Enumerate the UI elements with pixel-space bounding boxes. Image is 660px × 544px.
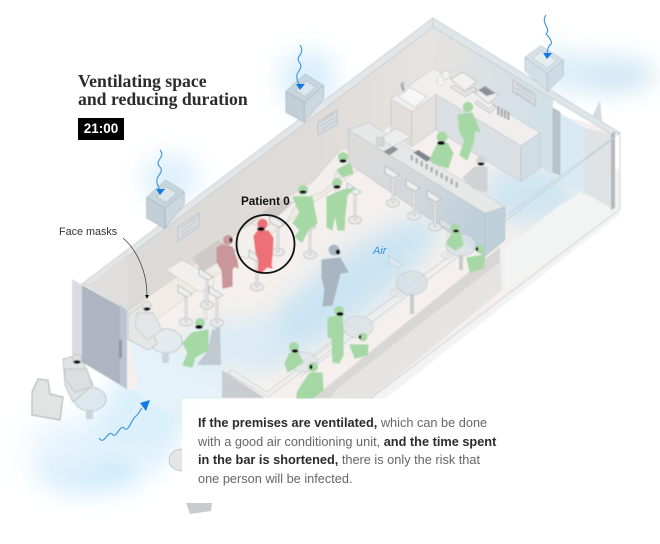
people [65, 102, 487, 398]
left wall [82, 18, 433, 312]
explanatory text [198, 415, 496, 486]
title [78, 71, 248, 109]
wavy air arrows [99, 15, 552, 440]
circle: patient 0 highlight [236, 215, 294, 273]
person: green booth [183, 319, 208, 367]
text panel [182, 399, 512, 503]
front wall stub [222, 343, 335, 398]
person: grey walking [322, 245, 348, 306]
person: patient 0 [254, 219, 273, 273]
time badge: 21:00 [84, 121, 118, 136]
AC unit left [147, 180, 184, 228]
person: green standing [327, 179, 355, 230]
person: green far right [447, 224, 463, 250]
person: green front left [285, 343, 303, 372]
wall bench [127, 157, 362, 328]
bar counter [348, 123, 505, 257]
person: green crouched [350, 333, 368, 358]
wall vents [178, 80, 535, 241]
person: green centre [328, 307, 344, 363]
time badge [78, 118, 124, 140]
person: seated left white [135, 302, 162, 340]
person: behind bar [430, 132, 453, 168]
arrow: air through door [99, 400, 150, 440]
label: air: Air [373, 245, 386, 257]
label: face masks: Face masks [59, 226, 117, 238]
arrow: air into left unit [156, 150, 165, 195]
person: green front [297, 363, 323, 398]
AC unit right [525, 46, 563, 92]
person: mauve exposed [217, 236, 238, 288]
arrow: air into right unit [543, 15, 552, 59]
front glass wall outlines [292, 133, 620, 399]
explanatory text: in the bar is shortened, there is only the risk that [198, 452, 480, 467]
person: green at bar table [337, 153, 353, 177]
title: Ventilating space [78, 71, 207, 91]
floor [127, 78, 620, 420]
person: green seated [293, 186, 317, 242]
person: grey bartender [463, 157, 487, 192]
door panel [72, 279, 127, 389]
person: seated lower white [65, 354, 92, 392]
person: green far right seated [467, 245, 485, 272]
front platform band [313, 210, 620, 399]
AC unit middle [286, 74, 324, 122]
kitchen counter [391, 68, 540, 182]
right outer floor [505, 168, 620, 290]
blue air glows [30, 48, 656, 491]
right wall [433, 18, 620, 210]
label: patient 0: Patient 0 [241, 195, 290, 208]
AC units [147, 46, 563, 228]
explanatory text: If the premises are ventilated, which can be done [198, 415, 487, 430]
explanatory text: with a good air conditioning unit, and the time spent [198, 434, 496, 448]
leader: face masks [123, 238, 149, 299]
arrow: air into middle unit [296, 45, 305, 90]
stools and tables [32, 166, 476, 420]
sink [398, 87, 427, 107]
explanatory text: one person will be infected. [198, 470, 353, 486]
person: kitchen walker [458, 102, 480, 160]
high tables [166, 149, 356, 319]
title: and reducing duration [78, 89, 248, 109]
